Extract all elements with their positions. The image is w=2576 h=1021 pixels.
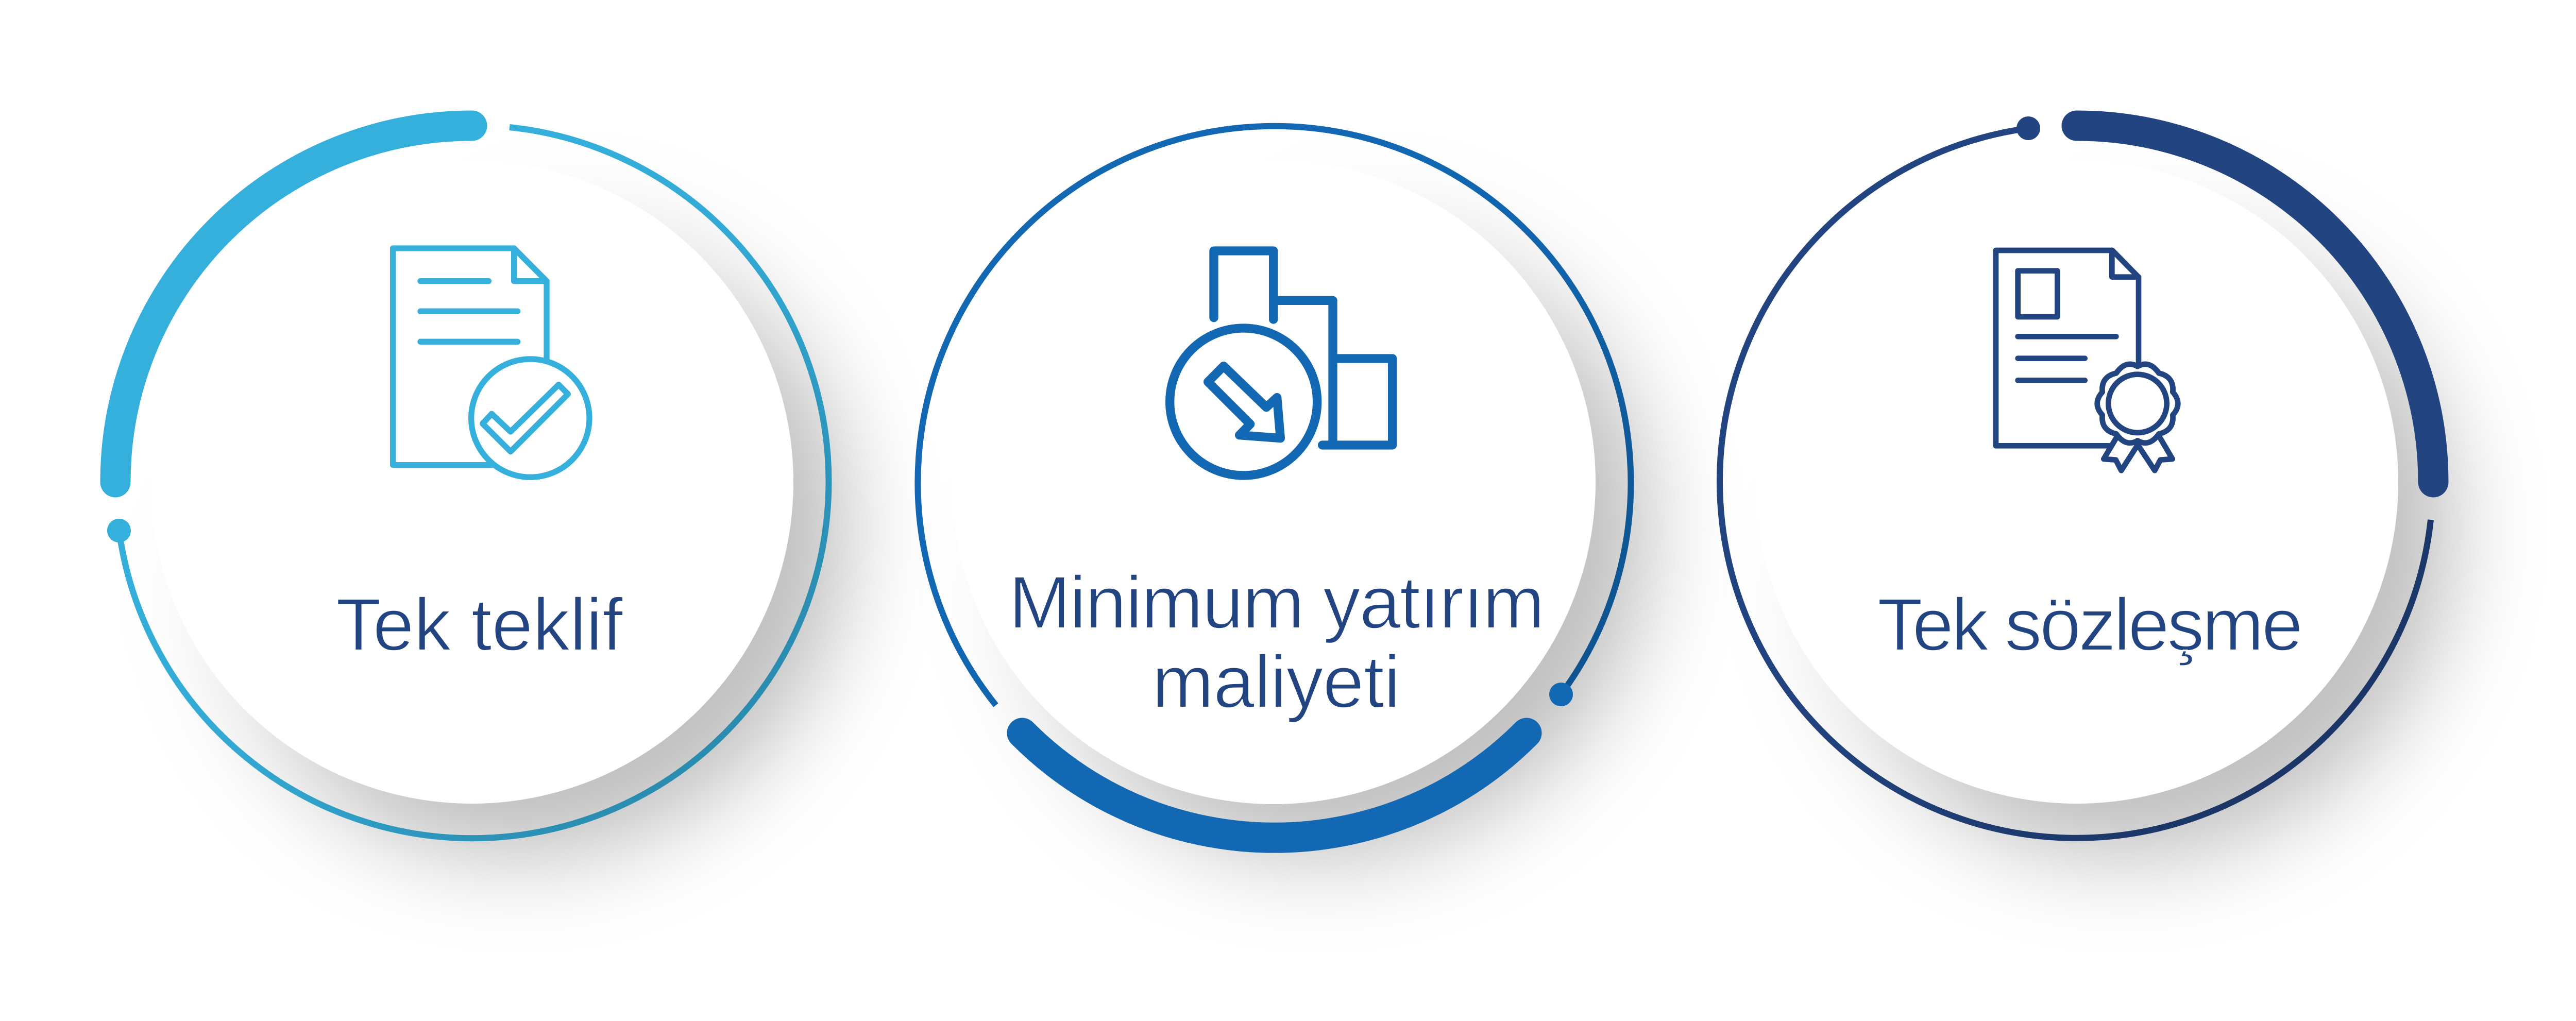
soft shadow — [1793, 199, 2453, 858]
thick arc — [115, 126, 472, 482]
icon: document with check mark — [393, 248, 589, 477]
label: Minimum yatırım maliyeti: maliyeti — [1152, 640, 1400, 723]
ring end dot — [107, 519, 131, 542]
panel: Minimum yatırım maliyeti — [918, 126, 1650, 858]
icon: falling cost bars with down arrow — [1170, 251, 1393, 475]
label: Tek sözleşme: Tek sözleşme — [1877, 583, 2303, 666]
white disc — [952, 160, 1596, 804]
thin ring: Tek teklif — [119, 127, 828, 838]
thin ring: Minimum yatırım maliyeti — [918, 126, 1631, 705]
label: Tek teklif: Tek teklif — [336, 583, 623, 666]
soft shadow — [189, 199, 848, 858]
ring end dot — [1549, 683, 1573, 706]
panel: Tek sözleşme — [1720, 116, 2453, 858]
soft shadow — [990, 199, 1650, 858]
panel: Tek teklif — [107, 126, 848, 858]
white disc — [150, 161, 793, 804]
thick arc — [1022, 733, 1527, 838]
label: Minimum yatırım maliyeti — [1009, 561, 1545, 723]
icon: certificate with rosette — [1996, 250, 2178, 470]
ring end dot — [2016, 116, 2040, 140]
white disc — [1755, 161, 2398, 804]
label: Minimum yatırım maliyeti: Minimum yatırım — [1009, 561, 1545, 644]
thin ring: Tek sözleşme — [1720, 128, 2431, 838]
thick arc — [2077, 126, 2433, 482]
